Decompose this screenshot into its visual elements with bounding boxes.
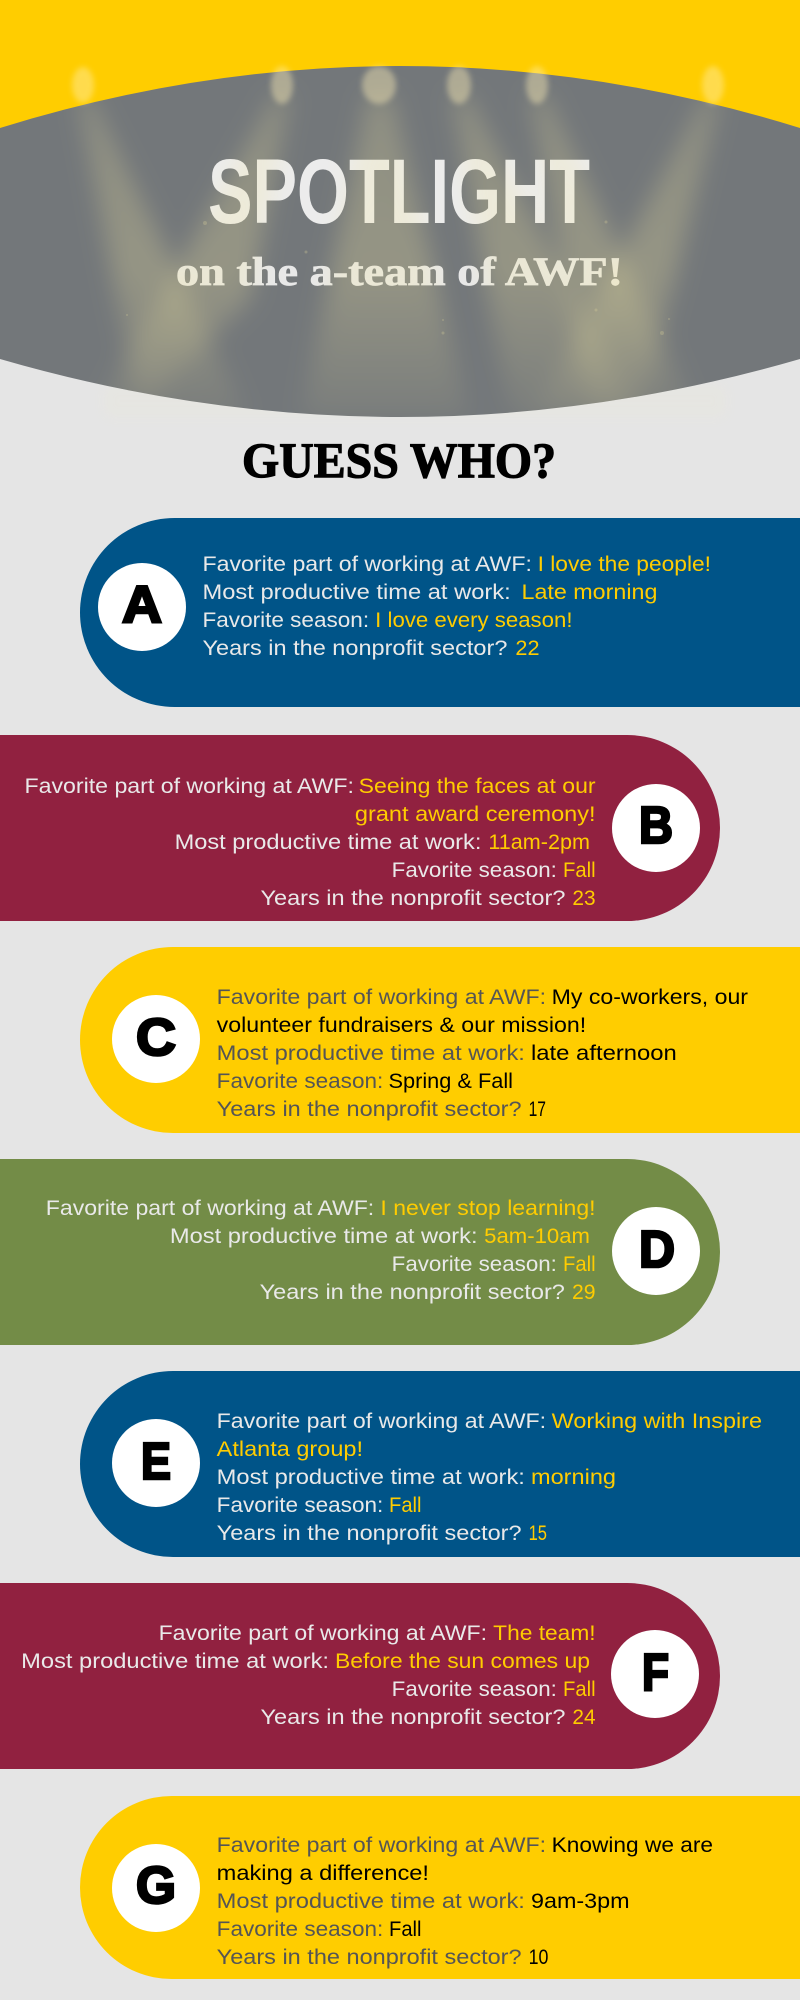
- panel E: [80, 1371, 800, 1557]
- panel C: [80, 947, 800, 1133]
- text C: volunteer fundraisers & our mission!: [217, 1014, 586, 1037]
- pill E: [80, 1371, 800, 1557]
- text C: Favorite season:: [217, 1070, 383, 1093]
- text A: Favorite part of working at AWF:: [202, 553, 532, 576]
- badge B: B: [639, 797, 673, 855]
- text B: 23: [572, 887, 596, 910]
- text A: I love every season!: [375, 609, 572, 632]
- panel B: [0, 735, 720, 921]
- text B: Fall: [563, 859, 596, 882]
- text B: Favorite season:: [392, 859, 557, 882]
- text G: making a difference!: [217, 1862, 429, 1885]
- text B: Years in the nonprofit sector?: [260, 887, 565, 910]
- text F: Fall: [563, 1678, 596, 1701]
- text C: 17: [529, 1098, 546, 1121]
- title: SPOTLIGHT: [208, 141, 590, 243]
- text F: Most productive time at work:: [21, 1650, 329, 1673]
- banner: stage with spotlights: [0, 66, 800, 420]
- text F: Favorite season:: [392, 1678, 557, 1701]
- text G: Favorite season:: [217, 1918, 383, 1941]
- stage ellipse: [0, 66, 800, 417]
- text B: Favorite part of working at AWF:: [24, 775, 354, 798]
- text D: Years in the nonprofit sector?: [260, 1281, 565, 1304]
- pill C: [80, 947, 800, 1133]
- spotlight beams: [78, 95, 720, 420]
- panel F: [0, 1583, 720, 1769]
- text E: morning: [531, 1466, 616, 1489]
- badge A: [98, 563, 186, 651]
- pill D: [0, 1159, 720, 1345]
- panel D: [0, 1159, 720, 1345]
- badge E: E: [141, 1433, 171, 1491]
- text A: 22: [515, 637, 540, 660]
- text E: 15: [529, 1522, 547, 1545]
- text E: Working with Inspire: [552, 1410, 762, 1433]
- text D: I never stop learning!: [380, 1197, 596, 1220]
- text G: Years in the nonprofit sector?: [217, 1946, 522, 1969]
- badge G: G: [136, 1857, 176, 1915]
- pill A: [80, 518, 800, 707]
- faint glow under banner: [105, 385, 725, 417]
- spotlight lamps: [72, 66, 724, 104]
- badge F: F: [642, 1644, 669, 1702]
- badge C: C: [136, 1009, 176, 1067]
- text F: Before the sun comes up: [335, 1650, 590, 1673]
- text E: Years in the nonprofit sector?: [217, 1522, 522, 1545]
- text B: Most productive time at work:: [175, 831, 481, 854]
- text B: 11am-2pm: [488, 831, 590, 854]
- text G: Most productive time at work:: [217, 1890, 525, 1913]
- badge B: [612, 784, 700, 872]
- text G: Knowing we are: [552, 1834, 713, 1857]
- text A: Most productive time at work:: [202, 581, 511, 604]
- heading: guess who: GUESS WHO?: [242, 432, 556, 488]
- text C: My co-workers, our: [552, 986, 748, 1009]
- text C: Years in the nonprofit sector?: [217, 1098, 522, 1121]
- pill F: [0, 1583, 720, 1769]
- text E: Atlanta group!: [217, 1438, 363, 1461]
- badge A: A: [122, 576, 162, 634]
- text G: Favorite part of working at AWF:: [217, 1834, 546, 1857]
- badge C: [112, 995, 200, 1083]
- text A: Years in the nonprofit sector?: [202, 637, 507, 660]
- light specks: [126, 220, 670, 335]
- text E: Favorite part of working at AWF:: [217, 1410, 546, 1433]
- text G: 10: [529, 1946, 548, 1969]
- badge F: [611, 1630, 699, 1718]
- text E: Favorite season:: [217, 1494, 383, 1517]
- pill B: [0, 735, 720, 921]
- panel G: [80, 1796, 800, 1979]
- pill G: [80, 1796, 800, 1979]
- badge D: [612, 1207, 700, 1295]
- text C: Most productive time at work:: [217, 1042, 525, 1065]
- text B: grant award ceremony!: [355, 803, 596, 826]
- badge D: D: [639, 1221, 675, 1279]
- badge G: [112, 1844, 200, 1932]
- text D: Fall: [563, 1253, 596, 1276]
- text F: Favorite part of working at AWF:: [159, 1622, 487, 1645]
- text F: The team!: [493, 1622, 596, 1645]
- text F: Years in the nonprofit sector?: [260, 1706, 565, 1729]
- text D: 5am-10am: [484, 1225, 590, 1248]
- top yellow band: [0, 0, 800, 200]
- text D: 29: [572, 1281, 596, 1304]
- text C: late afternoon: [531, 1042, 677, 1065]
- text D: Most productive time at work:: [170, 1225, 478, 1248]
- text D: Favorite part of working at AWF:: [46, 1197, 374, 1220]
- text C: Spring & Fall: [388, 1070, 513, 1093]
- text E: Fall: [389, 1494, 422, 1517]
- text C: Favorite part of working at AWF:: [217, 986, 546, 1009]
- text F: 24: [572, 1706, 596, 1729]
- text E: Most productive time at work:: [217, 1466, 525, 1489]
- text D: Favorite season:: [392, 1253, 557, 1276]
- badge E: [112, 1419, 200, 1507]
- text B: Seeing the faces at our: [359, 775, 596, 798]
- text G: Fall: [389, 1918, 422, 1941]
- text A: Favorite season:: [202, 609, 369, 632]
- subtitle: on the a-team of AWF!: [176, 249, 623, 294]
- text A: I love the people!: [538, 553, 711, 576]
- panel A: [80, 518, 800, 707]
- text A: Late morning: [522, 581, 657, 604]
- text G: 9am-3pm: [531, 1890, 630, 1913]
